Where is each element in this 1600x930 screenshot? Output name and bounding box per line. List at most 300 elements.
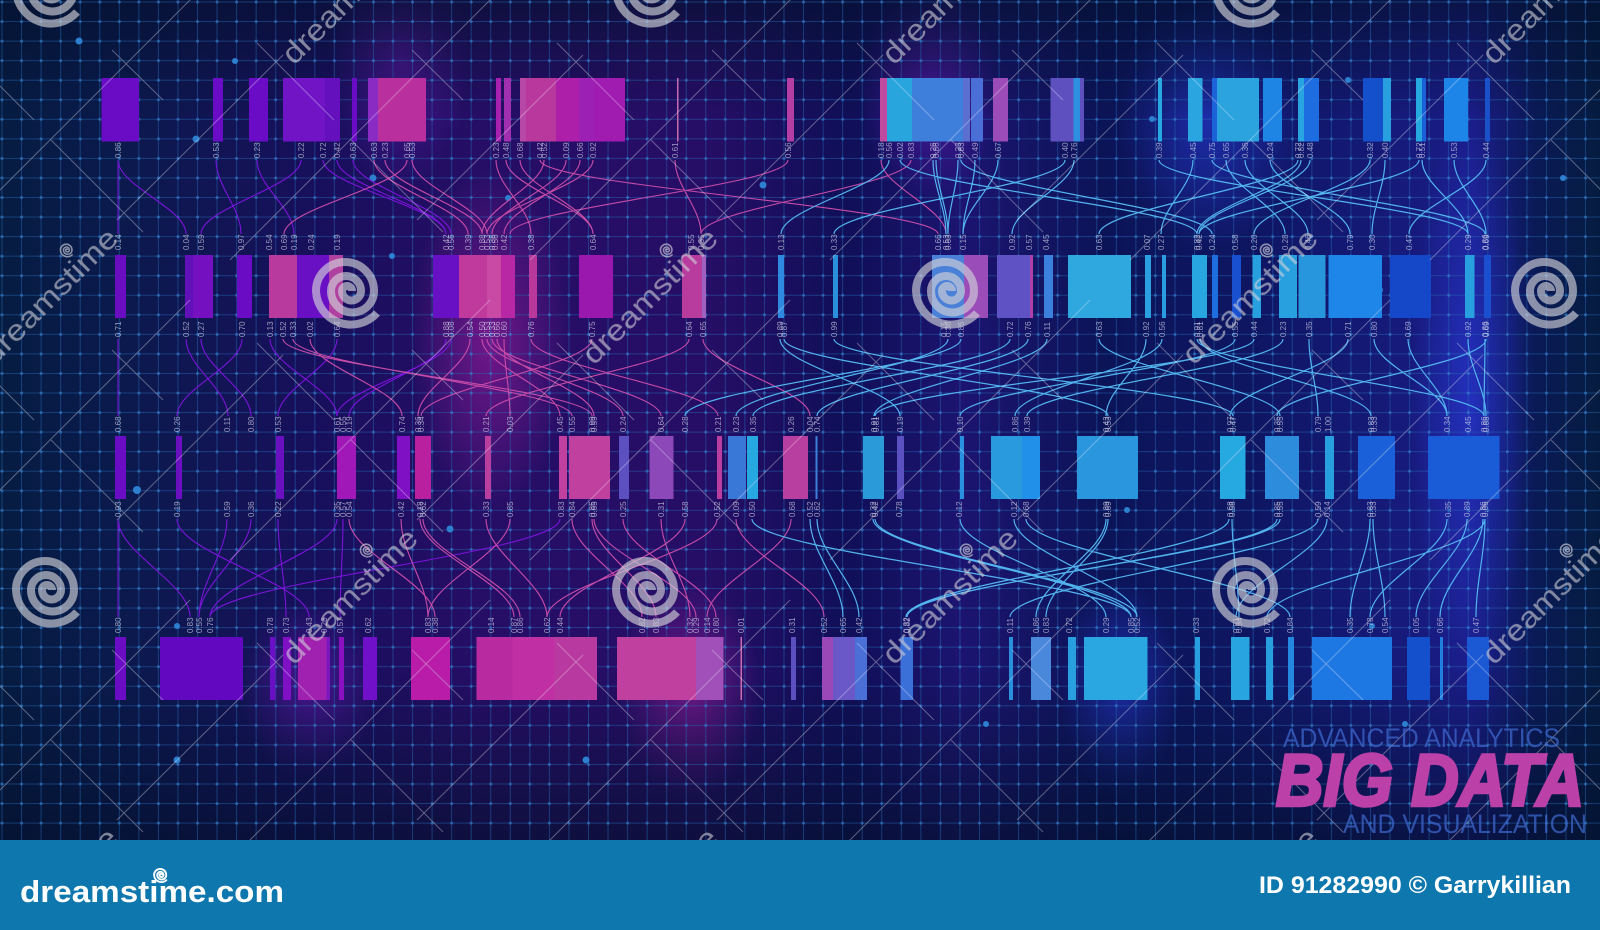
connection curves: row 1 to row 2 — [118, 160, 1486, 234]
value labels: above row 3: 0.34 — [1443, 416, 1452, 432]
value labels: below row 1: 0.40 — [1381, 142, 1390, 158]
value labels: above row 2: 0.29 — [1464, 234, 1473, 250]
value labels: above row 2: 0.07 — [1143, 234, 1152, 250]
value labels: above row 4: 0.65 — [839, 617, 848, 633]
value labels: above row 4: 0.29 — [692, 617, 701, 633]
value labels: below row 1: 0.56 — [885, 142, 894, 158]
value labels: above row 2: 0.79 — [1346, 234, 1355, 250]
value labels: below row 3: 0.66 — [1481, 501, 1490, 517]
value labels: below row 3: 0.89 — [1102, 501, 1111, 517]
value labels: above row 3: 0.91 — [870, 416, 879, 432]
value labels: above row 3: 0.53 — [274, 416, 283, 432]
value labels: below row 2: 0.69 — [1404, 321, 1413, 337]
value labels: above row 4: 0.78 — [1366, 617, 1375, 633]
value labels: above row 3: 0.80 — [247, 416, 256, 432]
value labels: below row 2: 0.71 — [1344, 321, 1353, 337]
value labels: below row 1 — [114, 142, 1491, 158]
value labels: above row 2: 0.53 — [483, 234, 492, 250]
value labels: above row 3: 0.88 — [1482, 416, 1491, 432]
value labels: below row 3: 0.62 — [419, 501, 428, 517]
value labels: above row 4: 0.83 — [1042, 617, 1051, 633]
value labels: above row 4: 0.43 — [305, 617, 314, 633]
value labels: below row 3: 0.68 — [1226, 501, 1235, 517]
value labels: above row 2: 0.86 — [1481, 234, 1490, 250]
value labels: below row 3: 0.65 — [590, 501, 599, 517]
value labels: above row 2: 0.14 — [114, 234, 123, 250]
value labels: above row 3: 0.19 — [345, 416, 354, 432]
value labels: below row 2: 0.92 — [1464, 321, 1473, 337]
value labels: above row 3: 0.23 — [732, 416, 741, 432]
value labels: below row 3: 0.12 — [1010, 501, 1019, 517]
value labels: above row 4: 0.38 — [431, 617, 440, 633]
watermark wordmarks: dreamstime — [276, 522, 425, 671]
value labels: above row 2: 0.53 — [942, 234, 951, 250]
value labels: above row 2: 0.58 — [1231, 234, 1240, 250]
value labels: above row 3: 0.61 — [333, 416, 342, 432]
value labels: above row 4: 0.62 — [364, 617, 373, 633]
value labels: below row 3: 0.14 — [1323, 501, 1332, 517]
value labels: below row 1: 0.45 — [1189, 142, 1198, 158]
value labels: below row 1: 0.51 — [1418, 142, 1427, 158]
value labels: below row 2: 0.13 — [266, 321, 275, 337]
value labels: below row 1: 0.48 — [502, 142, 511, 158]
value labels: above row 3: 0.45 — [1464, 416, 1473, 432]
value labels: below row 1: 0.67 — [994, 142, 1003, 158]
value labels: below row 1: 0.82 — [1297, 142, 1306, 158]
value labels: below row 3: 0.42 — [871, 501, 880, 517]
value labels: below row 3: 0.35 — [333, 501, 342, 517]
value labels: above row 2: 0.59 — [197, 234, 206, 250]
value labels: above row 4: 0.47 — [1472, 617, 1481, 633]
footer logo spiral — [154, 869, 167, 882]
value labels: below row 3: 0.85 — [588, 501, 597, 517]
value labels: above row 2: 0.30 — [1368, 234, 1377, 250]
value labels: above row 4 — [114, 617, 1481, 633]
value labels: below row 2: 0.85 — [957, 321, 966, 337]
value labels: below row 2: 0.64 — [333, 321, 342, 337]
value labels: below row 1: 0.92 — [589, 142, 598, 158]
value labels: above row 2: 0.38 — [527, 234, 536, 250]
value labels: above row 4: 0.44 — [556, 617, 565, 633]
value labels: above row 3: 0.35 — [1273, 416, 1282, 432]
value labels: below row 2: 0.23 — [1279, 321, 1288, 337]
value labels: above row 2: 0.39 — [464, 234, 473, 250]
value labels: below row 2: 0.53 — [483, 321, 492, 337]
value labels: above row 3: 0.21 — [714, 416, 723, 432]
value labels: above row 3: 0.33 — [1370, 416, 1379, 432]
value labels: above row 3: 0.19 — [896, 416, 905, 432]
value labels: below row 2: 0.71 — [114, 321, 123, 337]
value labels: above row 2: 0.46 — [1304, 234, 1313, 250]
value labels: below row 3: 0.36 — [247, 501, 256, 517]
value labels: below row 3: 0.93 — [114, 501, 123, 517]
value labels: below row 2: 0.52 — [279, 321, 288, 337]
value labels: above row 2: 0.56 — [447, 234, 456, 250]
value labels: below row 2: 0.91 — [1193, 321, 1202, 337]
value labels: below row 1: 0.42 — [333, 142, 342, 158]
value labels: below row 3: 0.84 — [568, 501, 577, 517]
value labels: below row 3: 0.58 — [1228, 501, 1237, 517]
value labels: above row 2: 0.42 — [442, 234, 451, 250]
value labels: above row 3: 0.55 — [1276, 416, 1285, 432]
value labels: above row 3: 0.81 — [872, 416, 881, 432]
value labels: below row 1: 0.76 — [1070, 142, 1079, 158]
value labels: below row 2: 0.50 — [478, 321, 487, 337]
value labels: below row 1: 0.52 — [540, 142, 549, 158]
value labels: below row 2: 0.35 — [1305, 321, 1314, 337]
value labels: below row 2: 0.08 — [447, 321, 456, 337]
value labels: below row 2: 0.75 — [588, 321, 597, 337]
value labels: below row 2: 0.36 — [944, 321, 953, 337]
value labels: above row 4: 0.29 — [1102, 617, 1111, 633]
value labels: above row 4: 0.72 — [1263, 617, 1272, 633]
bars: row 3 — [115, 436, 1500, 499]
title block — [1276, 723, 1587, 839]
value labels: above row 2: 0.47 — [1405, 234, 1414, 250]
value labels: above row 4: 0.35 — [1346, 617, 1355, 633]
value labels: below row 1: 0.75 — [1208, 142, 1217, 158]
value labels: above row 4: 0.80 — [712, 617, 721, 633]
value labels: below row 3: 0.31 — [657, 501, 666, 517]
bars: row 4 — [115, 637, 1489, 700]
value labels: below row 3: 0.83 — [1366, 501, 1375, 517]
value labels: above row 2: 0.19 — [290, 234, 299, 250]
value labels: below row 2: 0.44 — [1250, 321, 1259, 337]
value labels: above row 2: 0.54 — [265, 234, 274, 250]
value labels: below row 1: 0.44 — [1482, 142, 1491, 158]
value labels: below row 1: 0.56 — [784, 142, 793, 158]
value labels: below row 3: 0.54 — [345, 501, 354, 517]
value labels: above row 4: 0.14 — [487, 617, 496, 633]
value labels: above row 2: 0.57 — [1025, 234, 1034, 250]
value labels: above row 3: 0.83 — [1367, 416, 1376, 432]
value labels: above row 2: 0.82 — [1193, 234, 1202, 250]
value labels: below row 1: 0.83 — [907, 142, 916, 158]
value labels: above row 2: 0.42 — [500, 234, 509, 250]
value labels: below row 3: 0.33 — [1369, 501, 1378, 517]
value labels: below row 2: 0.86 — [1481, 321, 1490, 337]
value labels: below row 1: 0.63 — [349, 142, 358, 158]
value labels: below row 2: 0.76 — [1024, 321, 1033, 337]
value labels: below row 3: 0.55 — [1276, 501, 1285, 517]
value labels: below row 2: 0.27 — [197, 321, 206, 337]
footer credit: ID 91282990 © Garrykillian — [1259, 872, 1571, 899]
value labels: below row 1: 0.22 — [297, 142, 306, 158]
value labels: below row 1: 0.83 — [957, 142, 966, 158]
value labels: below row 1: 0.63 — [370, 142, 379, 158]
value labels: below row 1: 0.26 — [929, 142, 938, 158]
value labels: below row 1: 0.02 — [896, 142, 905, 158]
value labels: above row 4: 0.05 — [1412, 617, 1421, 633]
value labels: above row 4: 0.84 — [1286, 617, 1295, 633]
value labels: above row 4: 0.32 — [686, 617, 695, 633]
value labels: below row 1: 0.09 — [562, 142, 571, 158]
value labels: below row 3: 0.83 — [557, 501, 566, 517]
value labels: below row 3: 0.25 — [619, 501, 628, 517]
value labels: below row 1: 0.23 — [381, 142, 390, 158]
value labels: above row 2: 0.88 — [478, 234, 487, 250]
value labels: below row 2: 0.89 — [776, 321, 785, 337]
value labels: below row 2: 0.81 — [1196, 321, 1205, 337]
value labels: below row 2: 0.65 — [699, 321, 708, 337]
value labels: above row 2: 0.20 — [1250, 234, 1259, 250]
value labels: below row 1: 0.40 — [1061, 142, 1070, 158]
value labels: above row 2: 0.04 — [182, 234, 191, 250]
value labels: below row 2: 0.76 — [527, 321, 536, 337]
footer bar — [0, 840, 1600, 930]
value labels: above row 2: 0.63 — [1095, 234, 1104, 250]
value labels: above row 4: 0.66 — [1436, 617, 1445, 633]
value labels: below row 1: 0.61 — [671, 142, 680, 158]
value labels: above row 2: 0.28 — [1281, 234, 1290, 250]
value labels: below row 3: 0.33 — [482, 501, 491, 517]
value labels: below row 2: 0.02 — [306, 321, 315, 337]
value labels: below row 3: 0.22 — [274, 501, 283, 517]
value labels: above row 2: 0.64 — [589, 234, 598, 250]
value labels: below row 2: 0.69 — [1482, 321, 1491, 337]
value labels: above row 4: 0.52 — [820, 617, 829, 633]
value labels: above row 4: 0.32 — [902, 617, 911, 633]
value labels: below row 2: 0.11 — [1043, 321, 1052, 337]
value labels: above row 3: 0.59 — [590, 416, 599, 432]
value labels: below row 3: 0.12 — [955, 501, 964, 517]
value labels: above row 3: 0.74 — [398, 416, 407, 432]
value labels: below row 1: 0.86 — [932, 142, 941, 158]
value labels: below row 2: 0.56 — [1158, 321, 1167, 337]
value labels: below row 1: 0.68 — [516, 142, 525, 158]
value labels: below row 1: 0.65 — [403, 142, 412, 158]
value labels: above row 2: 0.56 — [491, 234, 500, 250]
value labels: below row 1: 0.36 — [1241, 142, 1250, 158]
value labels: above row 2: 0.63 — [944, 234, 953, 250]
value labels: above row 2: 0.42 — [1195, 234, 1204, 250]
value labels: above row 2: 0.24 — [307, 234, 316, 250]
value labels: below row 1: 0.65 — [1222, 142, 1231, 158]
value labels: below row 3: 0.52 — [713, 501, 722, 517]
value labels: above row 4: 0.31 — [788, 617, 797, 633]
value labels: above row 3: 0.64 — [657, 416, 666, 432]
value labels: below row 3: 0.19 — [173, 501, 182, 517]
value labels: below row 2: 0.52 — [182, 321, 191, 337]
value labels: below row 1: 0.72 — [319, 142, 328, 158]
value labels: above row 2: 0.19 — [333, 234, 342, 250]
value labels: above row 3: 0.11 — [223, 416, 232, 432]
value labels: above row 3: 0.03 — [506, 416, 515, 432]
value labels: above row 4: 0.80 — [114, 617, 123, 633]
value labels: below row 3: 0.59 — [223, 501, 232, 517]
value labels: below row 2: 0.33 — [289, 321, 298, 337]
value labels: below row 1: 0.66 — [576, 142, 585, 158]
value labels: above row 4: 0.51 — [1232, 617, 1241, 633]
value labels: above row 2: 0.33 — [830, 234, 839, 250]
value labels: below row 2: 0.60 — [500, 321, 509, 337]
value labels: above row 2: 0.27 — [1157, 234, 1166, 250]
value labels: below row 1: 0.23 — [492, 142, 501, 158]
bars: row 1 — [102, 78, 1490, 142]
value labels: below row 2: 0.72 — [1006, 321, 1015, 337]
value labels: below row 2: 0.33 — [488, 321, 497, 337]
value labels: above row 4: 0.72 — [1065, 617, 1074, 633]
value labels: below row 1: 0.42 — [536, 142, 545, 158]
watermark wordmarks: dreamstime — [576, 222, 725, 371]
value labels: above row 3: 0.34 — [417, 416, 426, 432]
value labels: above row 4: 0.86 — [516, 617, 525, 633]
value labels: below row 3: 0.42 — [397, 501, 406, 517]
value labels: above row 4: 0.54 — [1235, 617, 1244, 633]
value labels: above row 3: 0.24 — [619, 416, 628, 432]
value labels: above row 4: 0.11 — [1006, 617, 1015, 633]
subtitle: advanced analytics: ADVANCED ANALYTICS — [1283, 723, 1560, 753]
value labels: above row 4: 0.57 — [336, 617, 345, 633]
value labels: above row 2: 0.69 — [1482, 234, 1491, 250]
value labels: above row 3 — [114, 416, 1491, 432]
value labels: above row 4: 0.14 — [703, 617, 712, 633]
value labels: below row 3: 0.35 — [1444, 501, 1453, 517]
value labels: above row 3: 0.79 — [1314, 416, 1323, 432]
value labels: above row 3: 0.97 — [1226, 416, 1235, 432]
value labels: below row 2: 0.64 — [685, 321, 694, 337]
value labels: above row 2: 0.45 — [1042, 234, 1051, 250]
value labels: below row 1: 0.23 — [253, 142, 262, 158]
value labels: above row 3: 0.55 — [339, 416, 348, 432]
watermark spirals — [16, 0, 1576, 624]
value labels: above row 3: 0.86 — [1011, 416, 1020, 432]
value labels: below row 2: 0.66 — [493, 321, 502, 337]
value labels: above row 3: 1.00 — [1324, 416, 1333, 432]
value labels: below row 3: 0.85 — [1273, 501, 1282, 517]
value labels: above row 3: 0.68 — [114, 416, 123, 432]
value labels: above row 3: 0.43 — [1102, 416, 1111, 432]
value labels: below row 2: 0.63 — [1095, 321, 1104, 337]
value labels: below row 2: 0.70 — [238, 321, 247, 337]
value labels: above row 3: 0.21 — [482, 416, 491, 432]
value labels: above row 4: 0.87 — [510, 617, 519, 633]
value labels: below row 1: 0.23 — [954, 142, 963, 158]
value labels: above row 4: 0.01 — [737, 617, 746, 633]
value labels: above row 3: 0.10 — [956, 416, 965, 432]
watermark wordmarks: dreamstime — [876, 522, 1025, 671]
value labels: below row 1: 0.39 — [1155, 142, 1164, 158]
value labels: above row 2: 0.13 — [777, 234, 786, 250]
value labels: above row 2: 0.35 — [697, 234, 706, 250]
value labels: above row 2: 0.69 — [280, 234, 289, 250]
value labels: below row 1: 0.48 — [1306, 142, 1315, 158]
connection curves: row 3 to row 4 — [118, 519, 1485, 617]
value labels: above row 4: 0.85 — [1127, 617, 1136, 633]
value labels: above row 3: 0.35 — [749, 416, 758, 432]
value labels: above row 2: 0.97 — [237, 234, 246, 250]
value labels: above row 4: 0.42 — [855, 617, 864, 633]
value labels: above row 2: 0.66 — [934, 234, 943, 250]
value labels: below row 2: 0.15 — [940, 321, 949, 337]
value labels: below row 1: 0.53 — [1450, 142, 1459, 158]
value labels: below row 1: 0.72 — [1415, 142, 1424, 158]
value labels: below row 1: 0.49 — [971, 142, 980, 158]
value labels: above row 3: 0.28 — [681, 416, 690, 432]
value labels: above row 4: 0.55 — [195, 617, 204, 633]
value labels: below row 3: 0.86 — [1479, 501, 1488, 517]
value labels: below row 3: 0.52 — [806, 501, 815, 517]
value labels: below row 1: 0.32 — [1366, 142, 1375, 158]
value labels: above row 4: 0.26 — [320, 617, 329, 633]
value labels: above row 3: 0.55 — [568, 416, 577, 432]
watermark wordmarks: dreamstime — [1176, 222, 1325, 371]
value labels: above row 4: 0.78 — [266, 617, 275, 633]
value labels: above row 3: 0.47 — [1229, 416, 1238, 432]
value labels: above row 3: 0.99 — [588, 416, 597, 432]
value labels: below row 2: 0.99 — [830, 321, 839, 337]
value labels: below row 3: 0.89 — [1463, 501, 1472, 517]
value labels: above row 2 — [114, 234, 1491, 250]
value labels: below row 3: 0.62 — [813, 501, 822, 517]
value labels: below row 3: 0.85 — [506, 501, 515, 517]
value labels: above row 4: 0.73 — [282, 617, 291, 633]
value labels: below row 1: 0.18 — [877, 142, 886, 158]
value labels: below row 2: 0.80 — [1370, 321, 1379, 337]
footer logo text: dreamstime.com — [20, 874, 284, 909]
value labels: above row 4: 0.76 — [206, 617, 215, 633]
value labels: above row 4: 0.82 — [638, 617, 647, 633]
value labels: below row 3: 0.09 — [732, 501, 741, 517]
value labels: below row 2 — [114, 321, 1491, 337]
value labels: above row 2: 0.55 — [687, 234, 696, 250]
value labels: above row 3: 0.74 — [813, 416, 822, 432]
value labels: below row 3: 0.57 — [339, 501, 348, 517]
value labels: above row 3: 0.04 — [806, 416, 815, 432]
value labels: above row 3: 0.86 — [1480, 416, 1489, 432]
value labels: below row 1: 0.24 — [1266, 142, 1275, 158]
value labels: below row 3: 0.78 — [895, 501, 904, 517]
value labels: below row 3: 0.32 — [869, 501, 878, 517]
value labels: above row 4: 0.83 — [424, 617, 433, 633]
value labels: above row 2: 0.36 — [488, 234, 497, 250]
value labels: above row 4: 0.83 — [652, 617, 661, 633]
value labels: below row 3: 0.69 — [1104, 501, 1113, 517]
connection curves: row 2 to row 3 — [118, 339, 1486, 416]
value labels: above row 4: 0.83 — [186, 617, 195, 633]
value labels: above row 3: 0.26 — [173, 416, 182, 432]
value labels: below row 1: 0.53 — [408, 142, 417, 158]
value labels: below row 3: 0.59 — [1314, 501, 1323, 517]
value labels: below row 3: 0.58 — [681, 501, 690, 517]
value labels: below row 3 — [114, 501, 1490, 517]
value labels: above row 4: 0.62 — [543, 617, 552, 633]
value labels: above row 4: 0.52 — [1133, 617, 1142, 633]
value labels: above row 3: 0.53 — [1104, 416, 1113, 432]
value labels: below row 2: 0.92 — [1142, 321, 1151, 337]
value labels: below row 1: 0.86 — [114, 142, 123, 158]
value labels: above row 3: 0.36 — [414, 416, 423, 432]
value labels: below row 1: 0.53 — [212, 142, 221, 158]
value labels: above row 3: 0.26 — [787, 416, 796, 432]
value labels: below row 3: 0.68 — [1022, 501, 1031, 517]
value labels: above row 4: 0.33 — [1192, 617, 1201, 633]
value labels: below row 2: 0.55 — [1231, 321, 1240, 337]
value labels: below row 3: 0.18 — [416, 501, 425, 517]
value labels: below row 2: 0.88 — [442, 321, 451, 337]
value labels: below row 3: 0.68 — [788, 501, 797, 517]
bars: row 2 — [115, 255, 1491, 318]
value labels: below row 2: 0.87 — [780, 321, 789, 337]
value labels: above row 4: 0.82 — [903, 617, 912, 633]
value labels: above row 2: 0.15 — [959, 234, 968, 250]
value labels: above row 4: 0.86 — [1032, 617, 1041, 633]
value labels: below row 1: 0.72 — [1294, 142, 1303, 158]
value labels: above row 3: 0.39 — [1023, 416, 1032, 432]
value labels: above row 4: 0.54 — [1381, 617, 1390, 633]
value labels: above row 2: 0.92 — [1008, 234, 1017, 250]
value labels: below row 2: 0.54 — [466, 321, 475, 337]
